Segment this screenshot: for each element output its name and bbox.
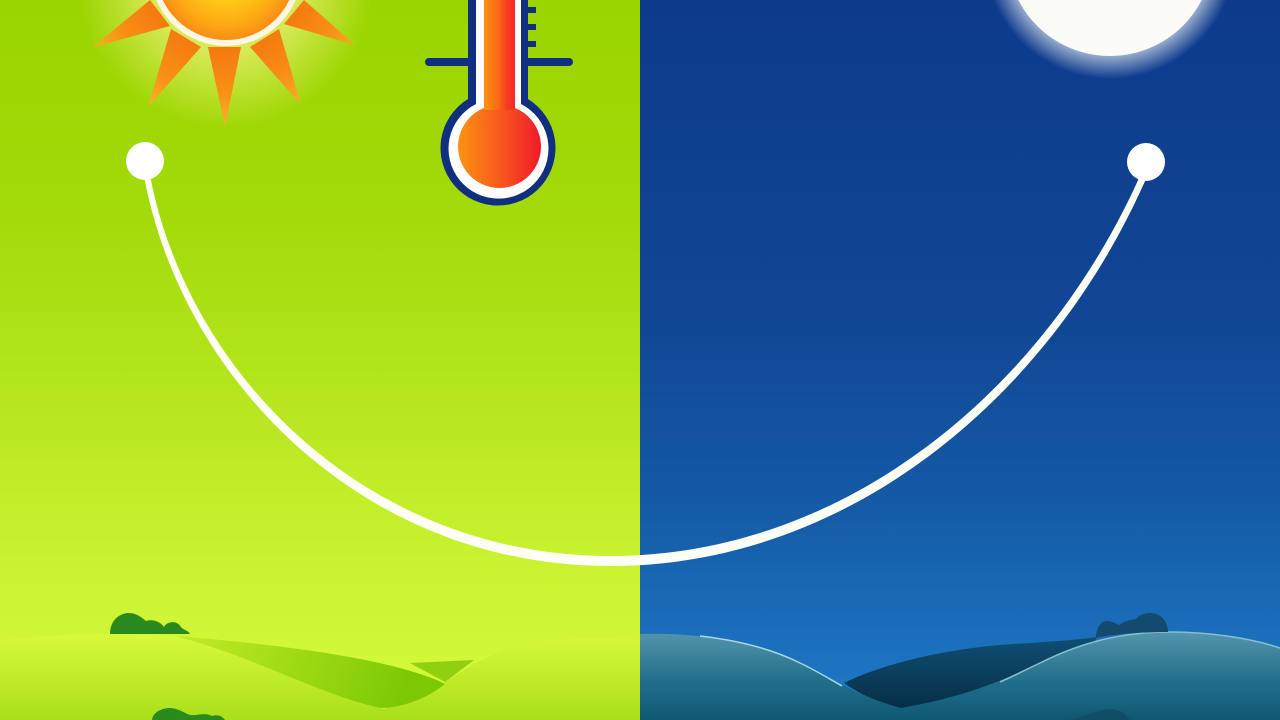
- marker: day endpoint: [126, 142, 164, 180]
- landscape: night hills: [640, 613, 1280, 720]
- panel: night background: [640, 0, 1280, 720]
- bush: lower night bush: [1070, 709, 1130, 720]
- bush: upper day bush: [110, 613, 190, 634]
- landscape: day hills: [0, 613, 640, 720]
- icon: thermometer: [429, 0, 569, 206]
- panel: day background: [0, 0, 640, 720]
- bush: lower day bush: [152, 708, 225, 720]
- icon: moon: [984, 0, 1236, 79]
- bush: upper night bush: [1096, 613, 1168, 638]
- connector: curved arc between sun and moon: [143, 169, 1149, 566]
- marker: night endpoint: [1127, 143, 1165, 181]
- icon: sun: [78, 0, 374, 128]
